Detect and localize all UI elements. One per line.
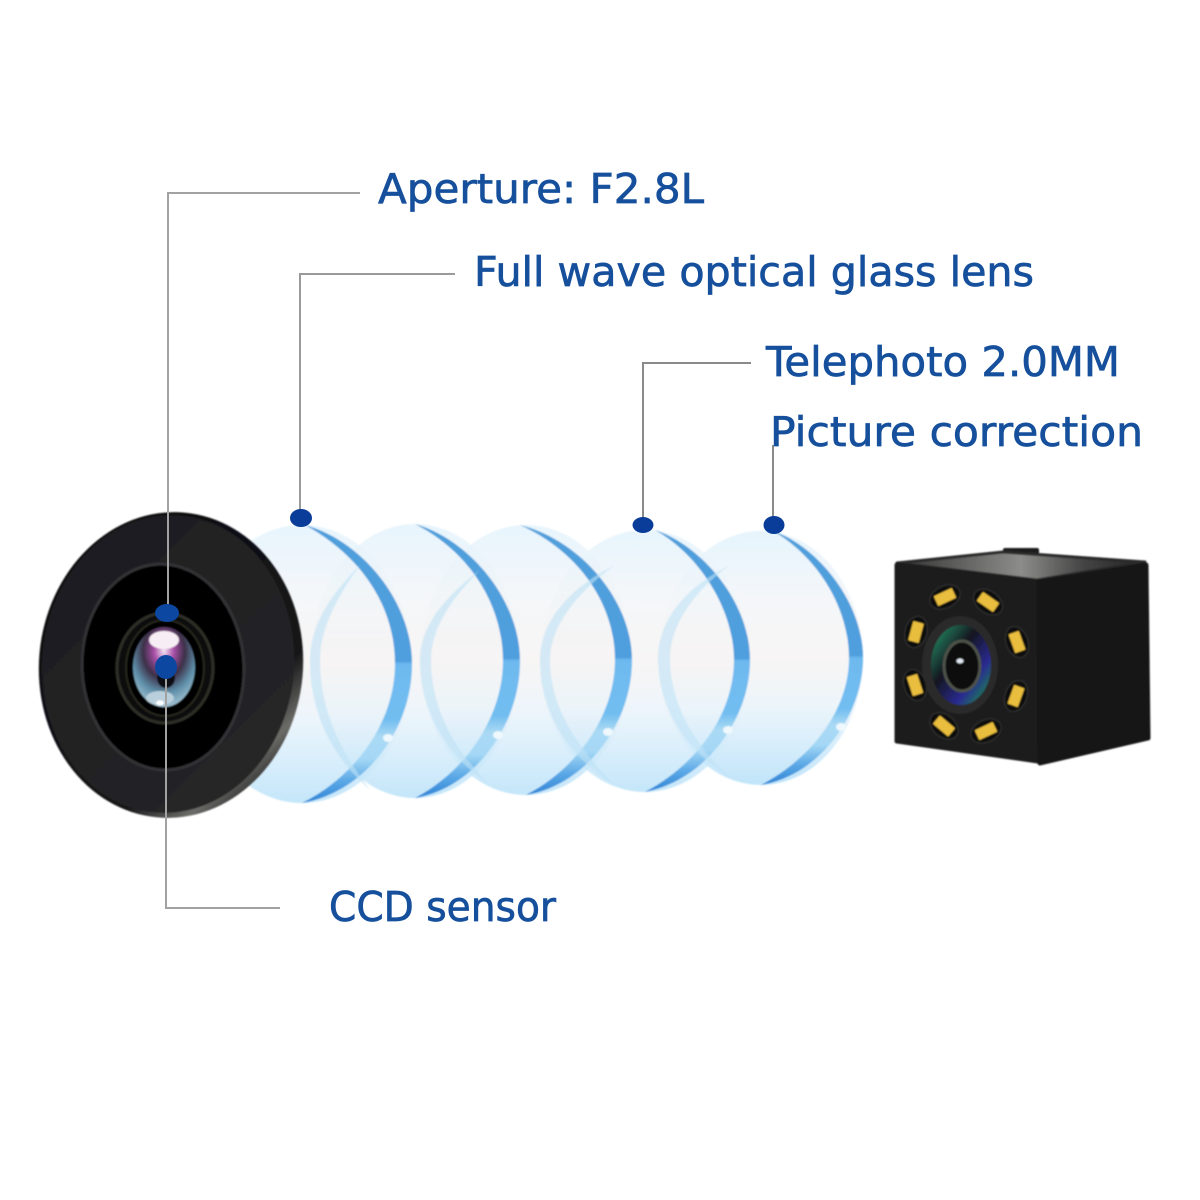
camera front face xyxy=(897,565,1038,761)
glass disc 4 xyxy=(540,530,750,792)
callout: CCD sensor: CCD sensor xyxy=(329,883,556,931)
camera lens xyxy=(922,616,998,714)
callout: telephoto: Telephoto 2.0MM xyxy=(765,338,1120,386)
glass disc 1 xyxy=(192,525,412,803)
glass disc 2 xyxy=(310,524,520,798)
camera side face xyxy=(1039,565,1148,763)
icon: backup camera xyxy=(897,548,1148,763)
glass lens stack xyxy=(192,524,863,803)
camera LEDs xyxy=(900,580,1033,748)
callout: telephoto xyxy=(632,338,1120,533)
callout: CCD sensor xyxy=(155,655,556,931)
glass disc 3 xyxy=(420,525,632,795)
inner rims of the discs xyxy=(310,565,730,790)
callout: aperture: Aperture: F2.8L xyxy=(378,165,704,213)
callout: picture correction: Picture correction xyxy=(770,408,1143,456)
callout: picture correction xyxy=(764,408,1143,534)
camera top face xyxy=(897,548,1145,580)
callout: full wave optical glass lens: Full wave optical glass lens xyxy=(474,248,1034,296)
glass disc 5 xyxy=(659,531,863,785)
icon: black lens barrel xyxy=(26,501,316,829)
callout: full wave optical glass lens xyxy=(290,248,1034,527)
callout: aperture xyxy=(155,165,704,622)
icon: lens glass xyxy=(133,627,195,707)
